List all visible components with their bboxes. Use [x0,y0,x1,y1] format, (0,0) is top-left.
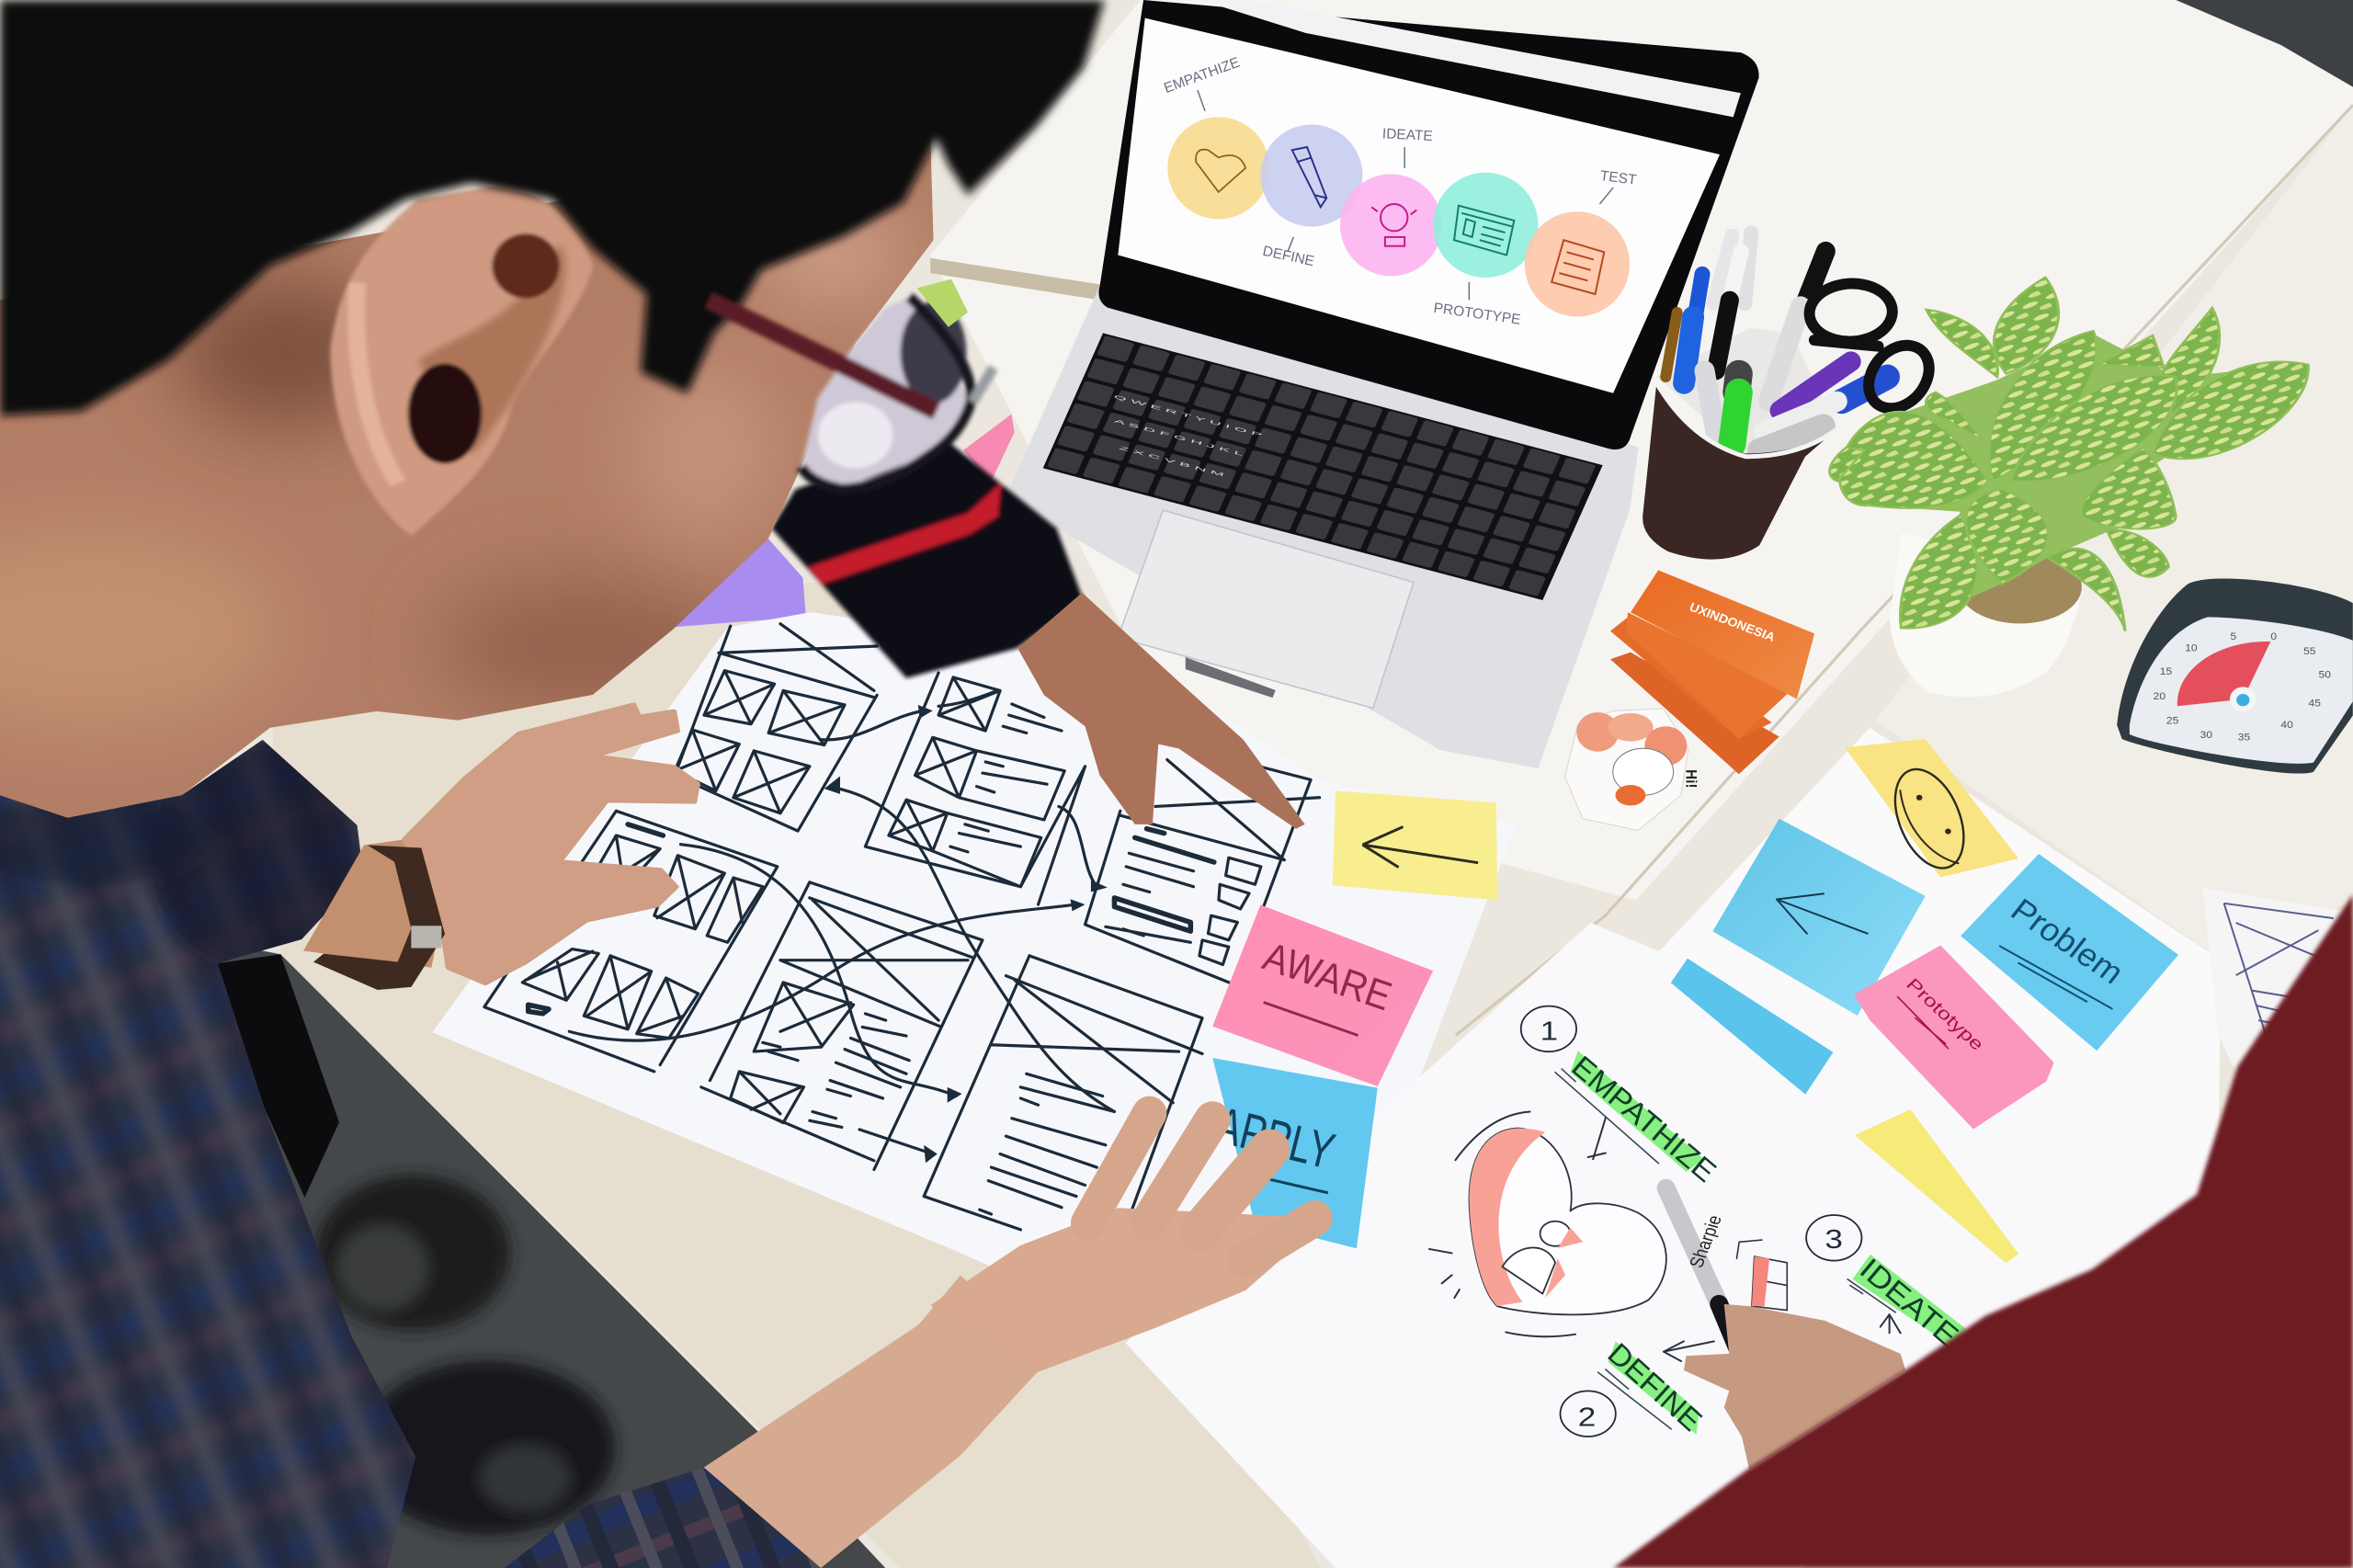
timer [2117,578,2353,774]
laptop [1006,0,1759,768]
right table plane [1876,105,2353,960]
cup interior [1656,328,1837,453]
timer: 50 [2319,669,2331,681]
table seam [1456,105,2353,1035]
colleague: red shirt [1613,894,2353,1568]
colleague: pointing hand [1017,593,1305,829]
man: ear [330,186,593,536]
dark corner top right [2176,0,2353,87]
foliage mass [1865,334,2308,628]
frame: right detail [1086,744,1320,984]
number one [1521,1006,1576,1051]
icon: prototype window [1454,206,1514,256]
mascot sticker [1565,709,1699,831]
sketch pencil [1736,1240,1787,1311]
sticky: AWARE: AWARE [1257,934,1397,1019]
man: sleeve cuff [505,1468,821,1568]
number two: 2 [1578,1403,1596,1432]
timer: 0 [2270,631,2278,642]
cup body [1643,383,1837,560]
sticky: blue arrow [1712,819,1926,1016]
number one: 1 [1540,1017,1558,1046]
timer: 35 [2238,732,2250,743]
number three: 3 [1824,1224,1843,1254]
frame: bottom right article [924,956,1202,1230]
colleague: hand holding pen [1684,1304,1905,1470]
man: shirt [0,740,415,1568]
sticky: Problem [1961,854,2178,1051]
man: face [0,120,961,840]
number three [1806,1215,1861,1261]
screen labels: EMPATHIZE [1162,54,1242,97]
floor [0,901,885,1568]
upper right table plane [930,0,2353,901]
sticky: Problem: Problem [2004,892,2131,991]
number two [1561,1391,1616,1437]
sticky corner seen behind glasses [917,279,968,327]
wooden beam [930,258,1105,301]
timer: 40 [2280,719,2293,731]
screen labels: PROTOTYPE [1433,301,1521,328]
keyboard: A S D F G H J K L [1113,418,1245,457]
laptop screen bezel [1098,0,1759,449]
man: wrist [303,839,445,968]
man: palm [930,1208,1328,1373]
icon: pencil [1292,147,1326,207]
screen [1118,18,1720,393]
pen in colleague hand: Sharpie [1686,1213,1726,1270]
screen labels [1162,54,1638,328]
sticky: yellow arrow [1333,790,1497,901]
screen arrows [1198,90,1613,301]
keyboard: Q W E R T Y U I O P [1113,393,1263,437]
trackpad [1118,510,1414,709]
browser strip [1200,0,1741,117]
colleague: black sleeve [771,438,1084,678]
man: fingers [1088,1113,1314,1260]
laptop base [1006,285,1639,768]
timer: 10 [2185,642,2198,654]
orange business cards [1610,570,1814,774]
sticky: Prototype: Prototype [1902,975,1987,1054]
sticky: small blue strip [1671,959,1833,1095]
sticky: APPLY [1210,1058,1378,1248]
screen labels: TEST [1599,168,1638,188]
man: watch [313,845,445,990]
plant pot [1890,533,2084,697]
soil [1959,550,2082,623]
scissors [1797,276,1938,413]
step circles [1167,117,1630,316]
heart drawing [1429,1111,1666,1336]
timer: 30 [2200,729,2213,741]
keyboard: Z X C V B N M [1118,445,1225,478]
mascot sticker: Hi! [1682,769,1699,789]
pens and markers [1665,233,1887,450]
lower table wood [270,570,1321,1568]
label: DEFINE: DEFINE [1601,1336,1709,1437]
timer: 5 [2231,631,2236,642]
man: hair [0,0,1105,415]
sticky: AWARE [1212,904,1433,1086]
man: pants [218,954,339,1198]
purple sticky note [671,539,806,627]
label: EMPATHIZE: EMPATHIZE [1565,1049,1723,1188]
pen cup [1643,233,1938,560]
label: IDEATE: IDEATE [1854,1251,1965,1353]
sketch arrows [1664,1314,1901,1361]
wireframe paper sheet [432,612,1516,1366]
timer: 15 [2160,665,2172,677]
timer: 45 [2309,698,2321,709]
frame: top middle list [865,673,1086,904]
timer: 55 [2303,646,2315,657]
sticky: Prototype [1854,945,2054,1129]
keyboard [1043,333,1603,600]
icon: heart [1196,150,1245,192]
man: lower forearm [704,1276,1051,1568]
sticker notes, cards, timer group mapped to table right [1565,570,2353,1263]
wireframe sketches [484,624,1320,1230]
frame: left grid [484,811,778,1072]
frame: center article [701,882,983,1169]
icon: checklist [1552,240,1604,294]
man [0,0,1328,1568]
pen in colleague hand [1666,1188,1752,1382]
timer: 20 [2154,691,2166,702]
label highlights [1570,1051,1966,1435]
screen labels: IDEATE [1381,126,1433,144]
concept sheet [1125,923,2218,1568]
plant [1830,278,2308,697]
stickies sheet [1651,728,2221,1321]
pink note behind sleeve [963,415,1015,483]
label underlines [1555,1069,1895,1429]
hinge notch [1186,657,1276,698]
concept sketch [1429,1006,1966,1437]
man: glasses [709,297,994,489]
sticky: APPLY: APPLY [1210,1096,1340,1180]
cup rim [1656,383,1837,457]
flow arrows [569,690,1114,1163]
leaves [1830,278,2308,631]
orange business cards: UXINDONESIA [1688,600,1778,644]
side wireframe sheet [2203,888,2353,1074]
timer: 25 [2166,715,2178,727]
sticky: yellow wedge [1855,1109,2018,1263]
icon: bulb [1371,204,1416,246]
screen labels: DEFINE [1261,244,1315,269]
man: hand [404,705,698,983]
man: wrist and left hand [303,705,698,990]
sticky: smile [1845,739,2018,878]
sandals on floor [315,1175,615,1535]
frame: top left grid [675,624,877,831]
